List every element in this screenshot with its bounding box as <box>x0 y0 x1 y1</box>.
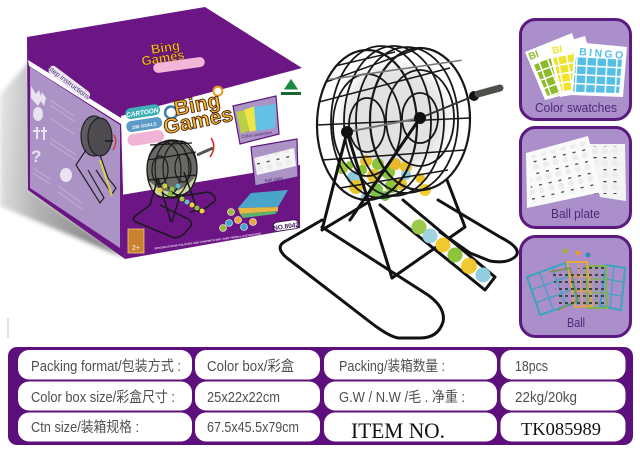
box left side: step instructions <box>46 65 91 102</box>
front labels: CARTOON <box>126 107 159 119</box>
row 2: G.W / N.W /毛 . 净重 : <box>339 389 465 406</box>
row 2: 22kg/20kg <box>515 390 577 406</box>
box shadow <box>0 60 125 258</box>
box front: SPECIFICATIONS COLOURS AND CONTENTS MAY VARY FROM ILLUSTRATIONS <box>154 232 262 250</box>
panel: ball <box>520 236 630 336</box>
red arrow side <box>113 135 116 150</box>
specification table <box>8 347 633 445</box>
box left side <box>27 37 125 259</box>
row 2: Color box size/彩盒尺寸 : <box>31 389 175 406</box>
label: Ball <box>567 315 585 330</box>
cage hoops <box>317 46 470 200</box>
top logo <box>139 37 186 69</box>
cage axle and rods <box>330 56 479 138</box>
row 3: Ctn size/装箱规格 : <box>31 419 139 436</box>
brand triangle <box>283 78 299 90</box>
chute balls <box>412 220 490 282</box>
row 1: 18pcs <box>515 359 548 375</box>
row 3 <box>18 412 626 443</box>
mini bingo cards <box>238 190 288 208</box>
front labels <box>123 103 165 147</box>
swatch cards: BI <box>527 49 541 63</box>
mini cage on side <box>76 116 116 203</box>
row 1 <box>18 350 626 380</box>
mini balls <box>220 208 256 232</box>
decorative mark <box>7 318 9 338</box>
mini swatches panel <box>233 96 279 144</box>
row 1: Packing format/包装方式 : <box>31 358 181 375</box>
item number badge: NO.8042 <box>273 222 300 232</box>
label: Color swatches <box>535 100 617 115</box>
instruction icons <box>31 86 72 182</box>
front labels: 200 GOALS <box>132 121 157 130</box>
panel: ball plate <box>520 128 630 228</box>
top logo: Games <box>140 47 186 69</box>
box front: Color swatches <box>241 130 273 139</box>
cage shadow <box>343 66 447 170</box>
row 2: 25x22x22cm <box>207 390 280 406</box>
bingo cage photo <box>280 46 517 338</box>
row 3: 67.5x45.5x79cm <box>207 420 299 436</box>
swatch cards <box>525 33 627 100</box>
box front: Ball plate <box>264 176 284 183</box>
stand frame <box>280 118 517 338</box>
front logo: Games <box>162 103 235 139</box>
label: Ball plate <box>551 206 600 221</box>
crank handle <box>478 88 500 94</box>
row 1: Packing/装箱数量 : <box>339 358 445 375</box>
row 3: TK085989 <box>521 419 601 439</box>
mini cage front <box>133 140 215 238</box>
top logo: Bing <box>150 38 181 57</box>
balls inside cage <box>336 155 431 201</box>
box front: 2+ <box>132 245 140 252</box>
instruction icons: ? <box>31 147 41 166</box>
ball frames <box>527 262 625 315</box>
swatch cards: BI <box>551 44 564 57</box>
front logo: Bing <box>172 89 222 121</box>
small balls <box>562 248 590 258</box>
row 2 <box>18 382 626 410</box>
front logo <box>158 85 235 139</box>
mini plate panel <box>251 139 298 186</box>
box front <box>27 7 302 259</box>
product box with shadow <box>0 7 302 259</box>
age badge <box>128 229 144 253</box>
row 3: ITEM NO. <box>351 418 445 443</box>
panel: color swatches <box>520 20 630 120</box>
red arrow front <box>210 138 214 157</box>
plates <box>526 136 626 208</box>
swatch cards: BINGO <box>579 46 624 62</box>
row 1: Color box/彩盒 <box>207 358 294 375</box>
